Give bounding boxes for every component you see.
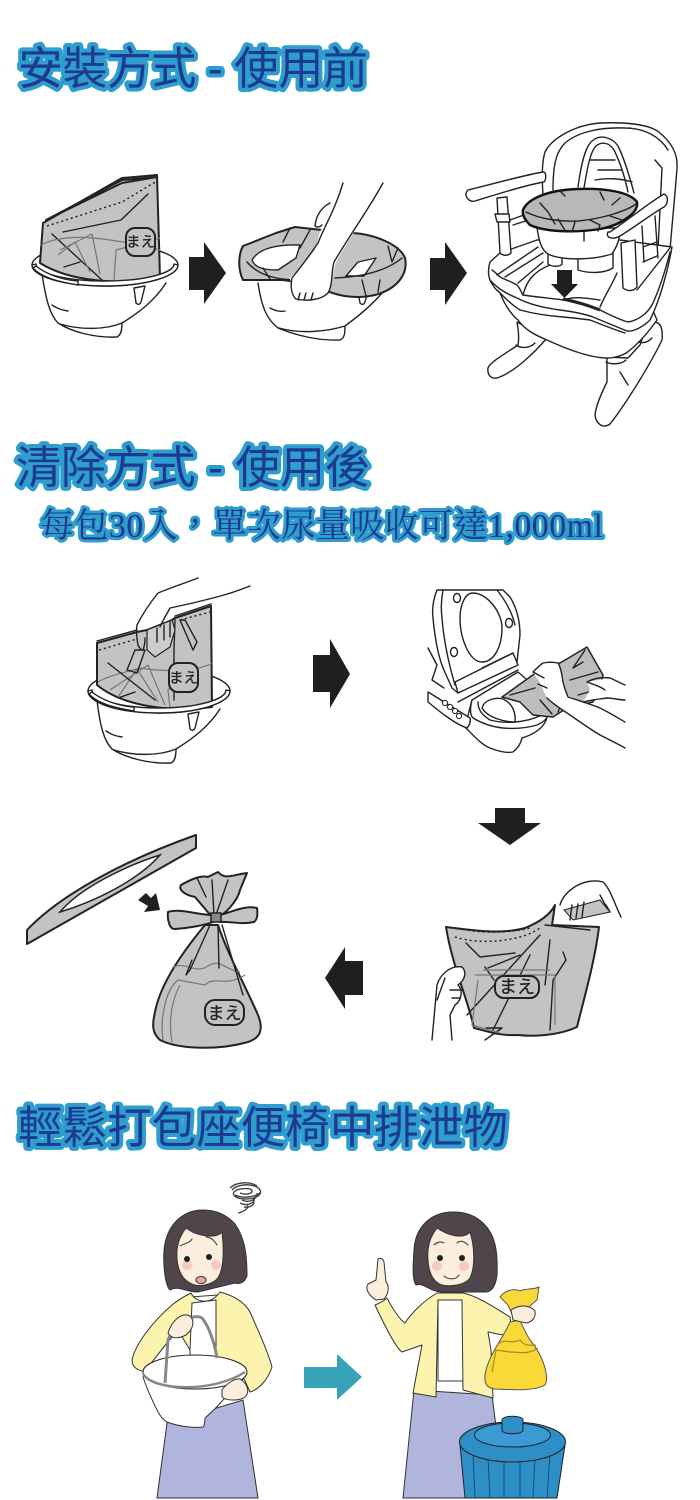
heading: installation before use: 安裝方式 - 使用前 bbox=[18, 43, 368, 94]
chair body bbox=[490, 280, 657, 358]
trash bin bbox=[460, 1416, 566, 1498]
heading: easily pack waste: 輕鬆打包座便椅中排泄物 bbox=[18, 1104, 508, 1153]
shirt bbox=[438, 1300, 463, 1381]
basin bbox=[143, 1376, 245, 1427]
shirt bbox=[190, 1295, 220, 1370]
arrow: apply strip to bag bbox=[138, 893, 160, 912]
label: mae tag: まえ bbox=[499, 977, 535, 997]
skirt bbox=[157, 1400, 258, 1498]
hand on basin bbox=[222, 1379, 248, 1400]
chair back bbox=[542, 123, 677, 255]
label: mae tag bbox=[169, 663, 198, 692]
skirt bbox=[403, 1390, 505, 1498]
arrow: cleanup step two to three bbox=[478, 808, 541, 845]
face bbox=[428, 1228, 474, 1286]
left armrest bbox=[497, 197, 511, 255]
cardigan and raised arm bbox=[375, 1293, 512, 1398]
illustration: happy woman with trash bin bbox=[367, 1212, 566, 1498]
heading: cleanup after use: 清除方式 - 使用後 bbox=[16, 442, 370, 493]
arrow: insert down bbox=[551, 270, 578, 298]
removable basin bbox=[548, 253, 562, 266]
swirl of worry bbox=[230, 1183, 261, 1213]
label: mae tag bbox=[126, 228, 155, 256]
illustration: folded bag in basin bbox=[32, 175, 178, 337]
illustration: worried woman with basin bbox=[132, 1183, 272, 1498]
arrow: step one to two bbox=[189, 242, 226, 304]
illustration: gripping open bag bbox=[432, 881, 621, 1040]
arrow: cleanup step one to two bbox=[313, 639, 350, 708]
arrow: step two to three bbox=[430, 242, 467, 305]
arrow: teal transition bbox=[304, 1354, 362, 1400]
illustration: portable toilet chair bbox=[466, 123, 677, 426]
legs bbox=[488, 322, 547, 378]
illustration: lifting bag out of basin bbox=[88, 578, 250, 763]
cardigan bbox=[132, 1292, 272, 1392]
label: mae tag: まえ bbox=[126, 235, 155, 251]
hand on handle bbox=[168, 1315, 193, 1338]
label: mae tag: まえ bbox=[208, 1004, 242, 1023]
illustration: hand spreading bag over basin bbox=[239, 183, 406, 340]
pointing hand bbox=[367, 1258, 388, 1300]
face bbox=[177, 1228, 223, 1285]
illustration: tied bag bbox=[153, 872, 261, 1048]
illustration: sealing strip bbox=[27, 835, 196, 944]
yellow bag bbox=[485, 1320, 546, 1390]
bag lining on seat bbox=[523, 189, 637, 231]
arrow: cleanup step three to four bbox=[325, 947, 363, 1009]
right armrest bbox=[621, 240, 637, 291]
hair bbox=[164, 1210, 247, 1292]
hair bbox=[413, 1212, 497, 1292]
label: mae tag: まえ bbox=[169, 671, 198, 687]
subheading: pack details: 每包30入，單次尿量吸收可達1,000ml bbox=[40, 507, 603, 545]
label: mae tag bbox=[205, 1000, 244, 1025]
illustration: placing bag in toilet bbox=[428, 590, 625, 752]
